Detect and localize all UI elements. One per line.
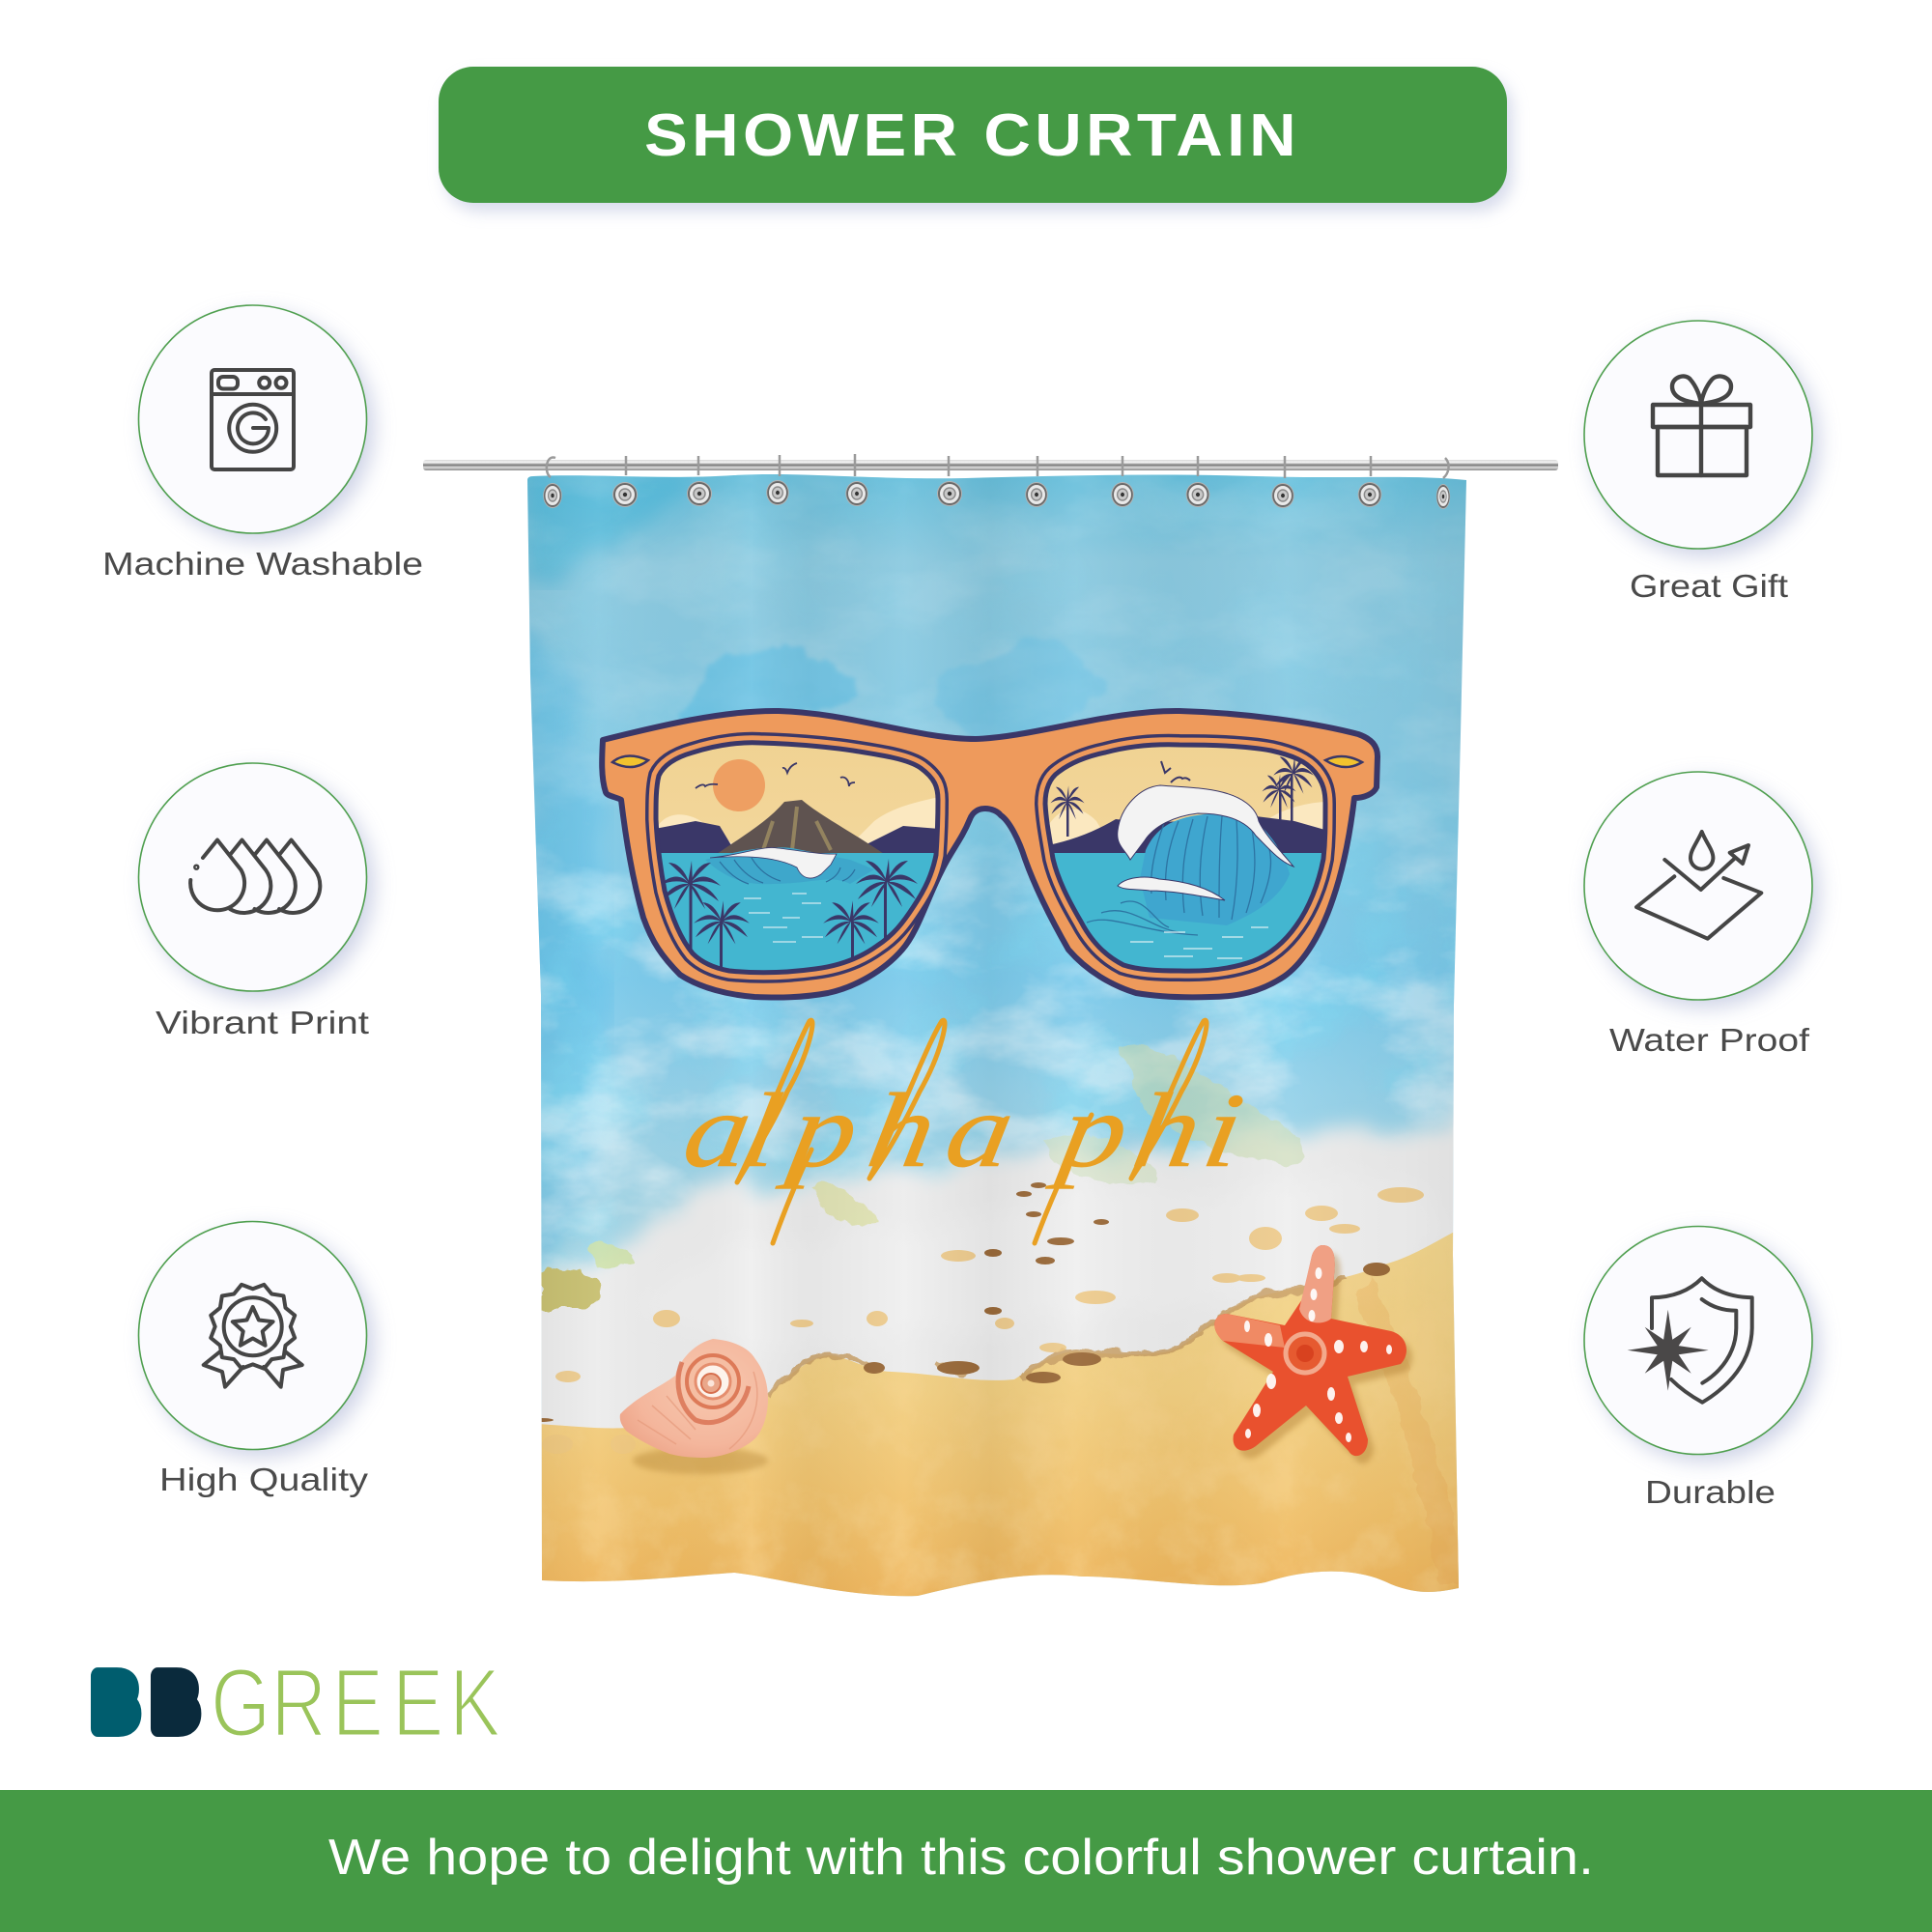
shower curtain [423, 454, 1558, 1604]
icon: washing machine [212, 370, 294, 469]
curtain hooks [547, 454, 1449, 478]
icon: award rosette [200, 1273, 306, 1387]
logo: BB Greek [94, 1650, 501, 1757]
label: Vibrant Print [156, 1005, 369, 1040]
logo initial B teal: B [94, 1660, 137, 1745]
right lens scene [1047, 747, 1323, 969]
palms [1050, 755, 1314, 837]
feature: water proof [1584, 772, 1819, 1058]
feature: vibrant print [139, 763, 374, 1040]
title: SHOWER CURTAIN [644, 102, 1300, 169]
big wave body [1140, 813, 1290, 925]
script text: phi [1044, 1072, 1251, 1189]
feature: high quality [139, 1221, 374, 1497]
sea [1055, 853, 1321, 969]
icon: gift box [1653, 376, 1750, 475]
sunglasses [602, 711, 1378, 998]
label: Durable [1645, 1474, 1776, 1510]
shoreline [768, 1277, 1345, 1395]
palms [659, 859, 918, 968]
script lettering: alpha phi [676, 1020, 1251, 1243]
starfish [1214, 1245, 1412, 1463]
feature: durable [1584, 1227, 1819, 1510]
icon: water repellent sheet [1636, 832, 1761, 939]
volcano [717, 800, 884, 854]
icon: shield with impact star [1628, 1278, 1752, 1403]
island [1048, 816, 1328, 854]
seashell [620, 1339, 768, 1474]
feature: great gift [1584, 321, 1819, 604]
script ascender and descender flourishes [737, 1020, 1207, 1243]
feature: machine washable [102, 305, 423, 582]
sea [661, 853, 934, 970]
sun [713, 759, 765, 811]
footer band [0, 1790, 1932, 1932]
label: Water Proof [1609, 1022, 1810, 1058]
foam [541, 1104, 1453, 1428]
sand [522, 1219, 1478, 1604]
logo wordmark: GREEK [211, 1650, 501, 1757]
lens outlines [656, 743, 1325, 973]
ripples [1130, 927, 1268, 958]
left side deep blue wash [522, 618, 606, 1275]
logo initial B navy: B [154, 1660, 197, 1745]
label: Great Gift [1630, 568, 1788, 604]
left lens scene [659, 745, 935, 970]
birds [696, 763, 855, 788]
sand flecks [555, 1187, 1424, 1382]
curtain rod [423, 460, 1558, 470]
title banner [439, 67, 1513, 212]
fabric fold shading [522, 471, 1478, 1602]
rivet left [612, 755, 648, 767]
curtain grommets [543, 480, 1450, 509]
rivet right [1325, 756, 1362, 767]
footer text: We hope to delight with this colorful shower curtain. [328, 1830, 1594, 1886]
wave crest [1118, 785, 1293, 867]
label: High Quality [159, 1462, 369, 1497]
glasses frame [602, 711, 1378, 998]
concentric lens rings [656, 743, 1325, 973]
label: Machine Washable [102, 546, 423, 582]
script text: alpha [676, 1072, 1022, 1189]
birds [1161, 761, 1190, 782]
left wave [705, 847, 874, 884]
curtain fabric [502, 471, 1497, 1604]
icon: ink drops [190, 840, 320, 913]
pebbles [528, 1182, 1390, 1422]
green algae washes [1121, 1044, 1304, 1164]
lower crest [1118, 877, 1225, 900]
